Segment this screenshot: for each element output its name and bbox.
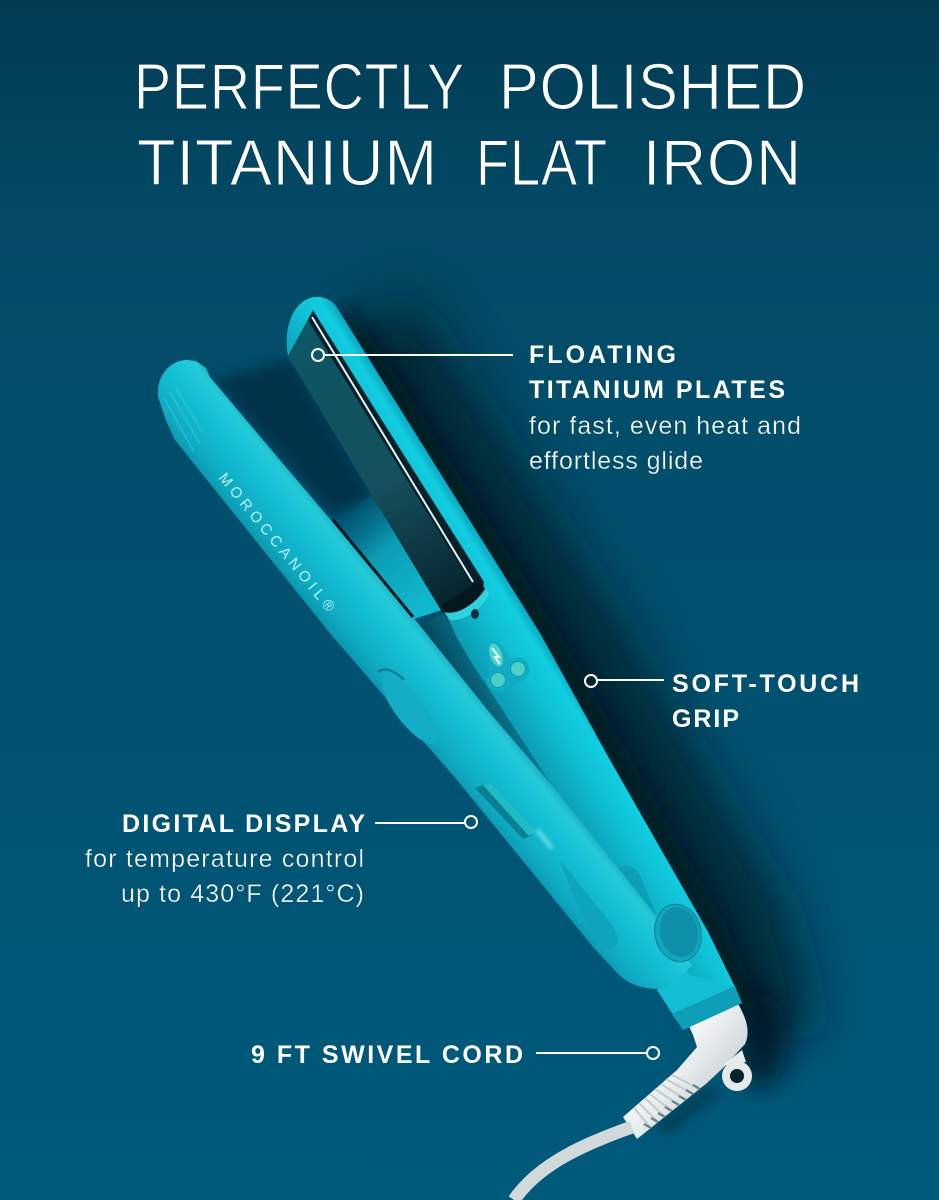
upper arm xyxy=(287,297,735,987)
iron drop shadow xyxy=(215,318,786,1130)
title: POLISHED xyxy=(499,50,807,123)
callout: swivel cord: 9 FT SWIVEL CORD xyxy=(251,1041,523,1069)
head ridges xyxy=(164,388,202,452)
reflection beside plate xyxy=(333,495,442,619)
plate dark channel xyxy=(308,311,484,590)
slider xyxy=(617,866,656,918)
callout: digital display xyxy=(85,810,477,908)
cord loop xyxy=(722,1050,752,1091)
lower arm xyxy=(158,360,692,989)
callout: digital display: for temperature control xyxy=(85,845,364,873)
control buttons xyxy=(486,641,529,691)
lower grip recess xyxy=(560,860,618,948)
hinge hole xyxy=(471,609,479,619)
callout: floating titanium plates: for fast, even heat and xyxy=(529,412,801,440)
callout: digital display: up to 430°F (221°C) xyxy=(121,880,364,908)
plate rim xyxy=(444,587,489,620)
collar xyxy=(657,930,742,1030)
plate xyxy=(288,310,484,613)
callout: soft-touch grip: GRIP xyxy=(672,705,739,733)
plate base xyxy=(442,581,486,613)
callout: digital display: DIGITAL DISPLAY xyxy=(122,810,365,838)
digital display xyxy=(475,783,552,848)
strain relief ribs xyxy=(634,1075,700,1128)
title: IRON xyxy=(643,126,802,199)
swivel connector xyxy=(623,1002,748,1139)
title: PERFECTLY xyxy=(134,50,465,123)
plate white edge xyxy=(312,317,473,582)
oval grip recess xyxy=(373,668,447,752)
flat iron illustration xyxy=(158,297,752,1200)
callout: soft-touch grip: SOFT-TOUCH xyxy=(672,670,859,698)
shaded inner side of upper arm xyxy=(420,614,555,790)
callout: floating titanium plates: FLOATING xyxy=(529,341,676,369)
title xyxy=(134,50,807,199)
callout: floating titanium plates: TITANIUM PLATES xyxy=(529,376,785,404)
title: FLAT xyxy=(476,126,608,199)
callout: floating titanium plates xyxy=(312,341,801,475)
arm edge line under plate xyxy=(333,520,413,617)
title: TITANIUM xyxy=(137,126,438,199)
pivot button xyxy=(649,900,707,966)
callout: floating titanium plates: effortless glide xyxy=(529,447,703,475)
cord xyxy=(514,1127,632,1200)
callout: swivel cord xyxy=(251,1041,659,1069)
callout: soft-touch grip xyxy=(585,670,859,733)
brand text: MOROCCANOIL® xyxy=(215,470,338,615)
rib shadows xyxy=(644,1085,700,1128)
